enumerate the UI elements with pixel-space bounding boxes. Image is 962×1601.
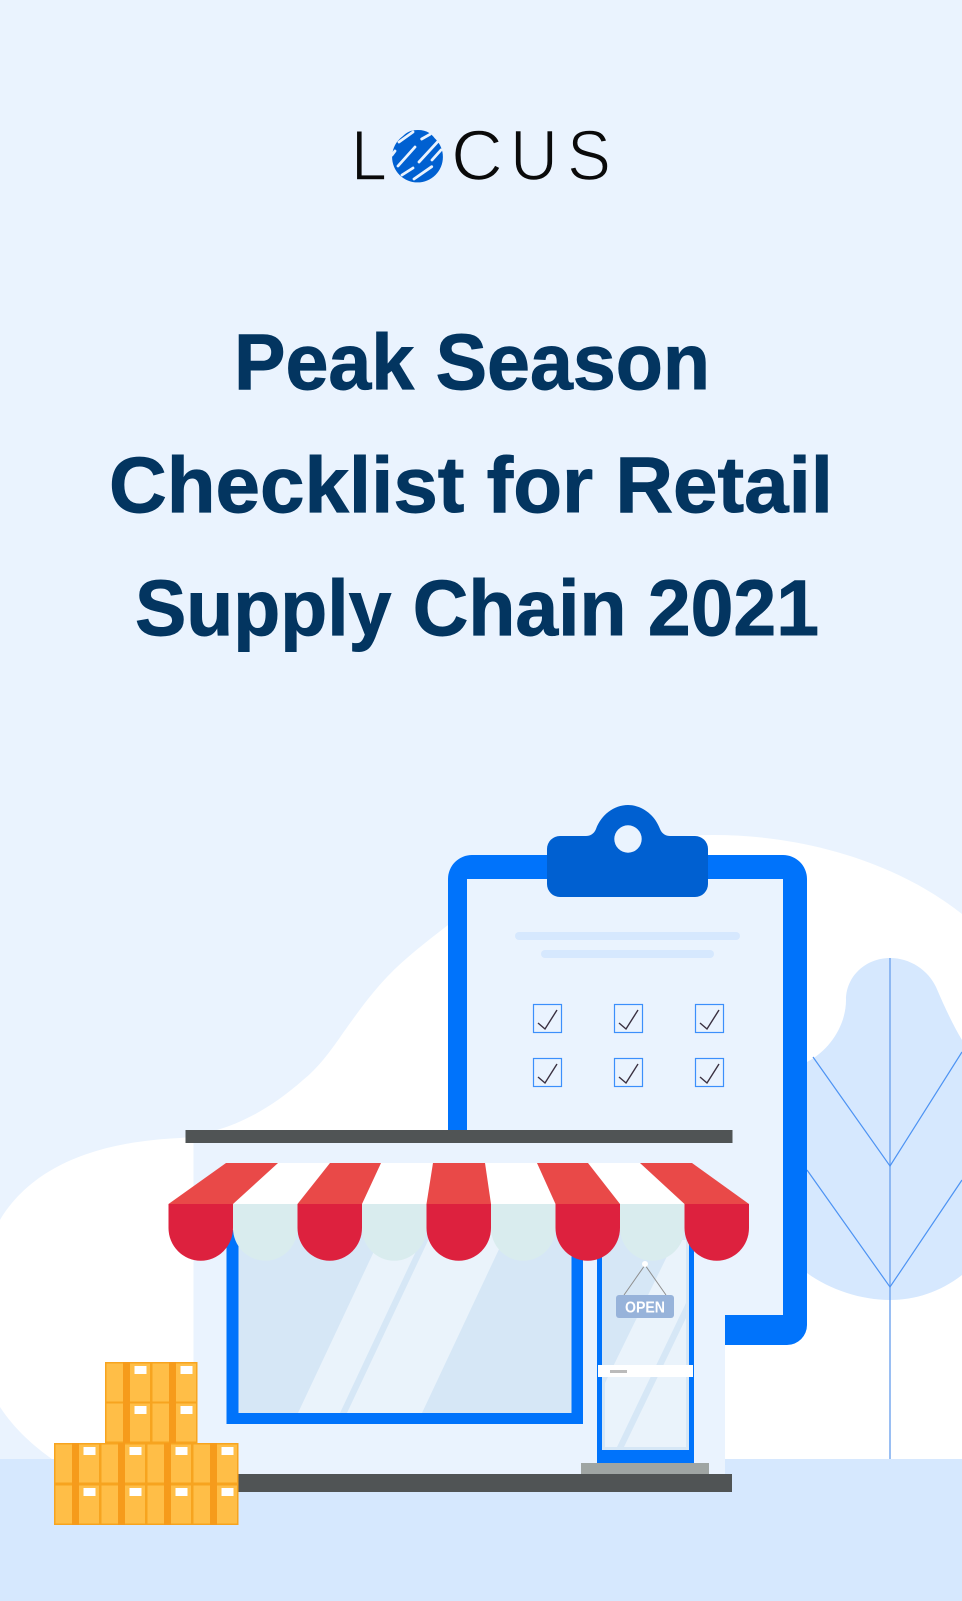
ground bar	[186, 1474, 732, 1492]
door bar	[598, 1365, 693, 1377]
clip hole	[614, 825, 642, 853]
roof bar	[186, 1130, 732, 1143]
title: Peak Season	[234, 317, 710, 406]
title: Supply Chain 2021	[135, 563, 819, 652]
tree	[807, 958, 962, 1459]
floor	[0, 1459, 962, 1601]
door	[581, 1230, 709, 1475]
icon: globe	[392, 132, 443, 182]
building wall	[194, 1143, 725, 1475]
title: Checklist for Retail	[109, 440, 833, 529]
window	[226, 1230, 583, 1424]
logo: L	[351, 117, 387, 196]
checkboxes	[534, 1004, 724, 1086]
open sign: OPEN	[625, 1300, 665, 1316]
stacked boxes	[55, 1362, 238, 1525]
clipboard	[448, 805, 807, 1345]
logo: S	[567, 117, 611, 196]
open sign	[616, 1261, 674, 1318]
logo: O	[394, 117, 442, 196]
logo: C	[451, 117, 503, 196]
title	[109, 317, 833, 652]
logo: U	[510, 117, 558, 196]
logo	[351, 117, 611, 196]
door step	[581, 1463, 709, 1475]
checklist heading lines	[515, 932, 740, 958]
clipboard clip	[547, 805, 708, 897]
white background blob	[0, 835, 962, 1459]
storefront	[168, 1130, 749, 1492]
awning	[168, 1163, 749, 1261]
